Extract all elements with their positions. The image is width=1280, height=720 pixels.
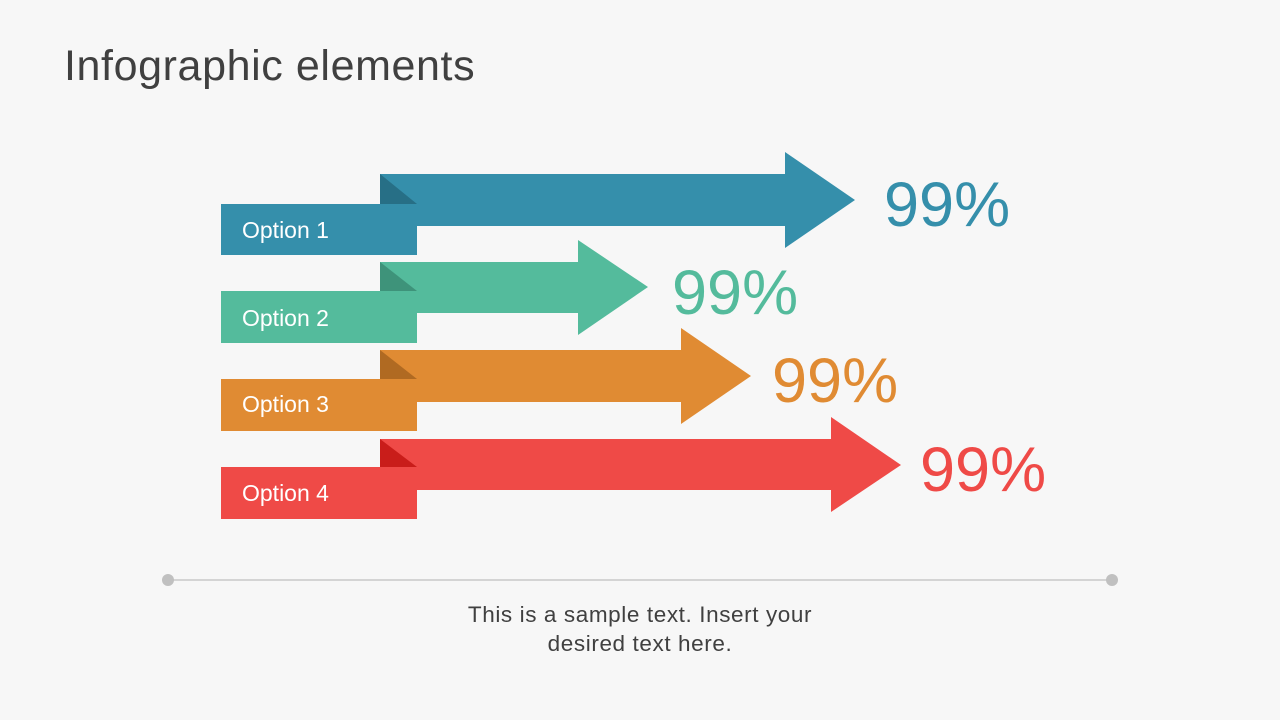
arrow row 1: 99% <box>884 170 1010 240</box>
arrow row 3: 99% <box>772 346 898 416</box>
arrow row 2 <box>221 240 798 343</box>
arrow row 4 <box>221 417 1046 519</box>
arrow row 3: Option 3 <box>242 391 329 417</box>
arrow row 3 <box>221 328 898 431</box>
caption text: desired text here. <box>548 631 732 656</box>
caption text <box>468 602 812 656</box>
title: Infographic elements <box>64 42 475 90</box>
arrow row 4: Option 4 <box>242 480 329 506</box>
arrow row 2: 99% <box>672 258 798 328</box>
arrow row 4: 99% <box>920 435 1046 505</box>
arrow row 2: Option 2 <box>242 305 329 331</box>
arrow row 1 <box>221 152 1010 255</box>
arrow row 1: Option 1 <box>242 217 329 243</box>
caption text: This is a sample text. Insert your <box>468 602 812 627</box>
